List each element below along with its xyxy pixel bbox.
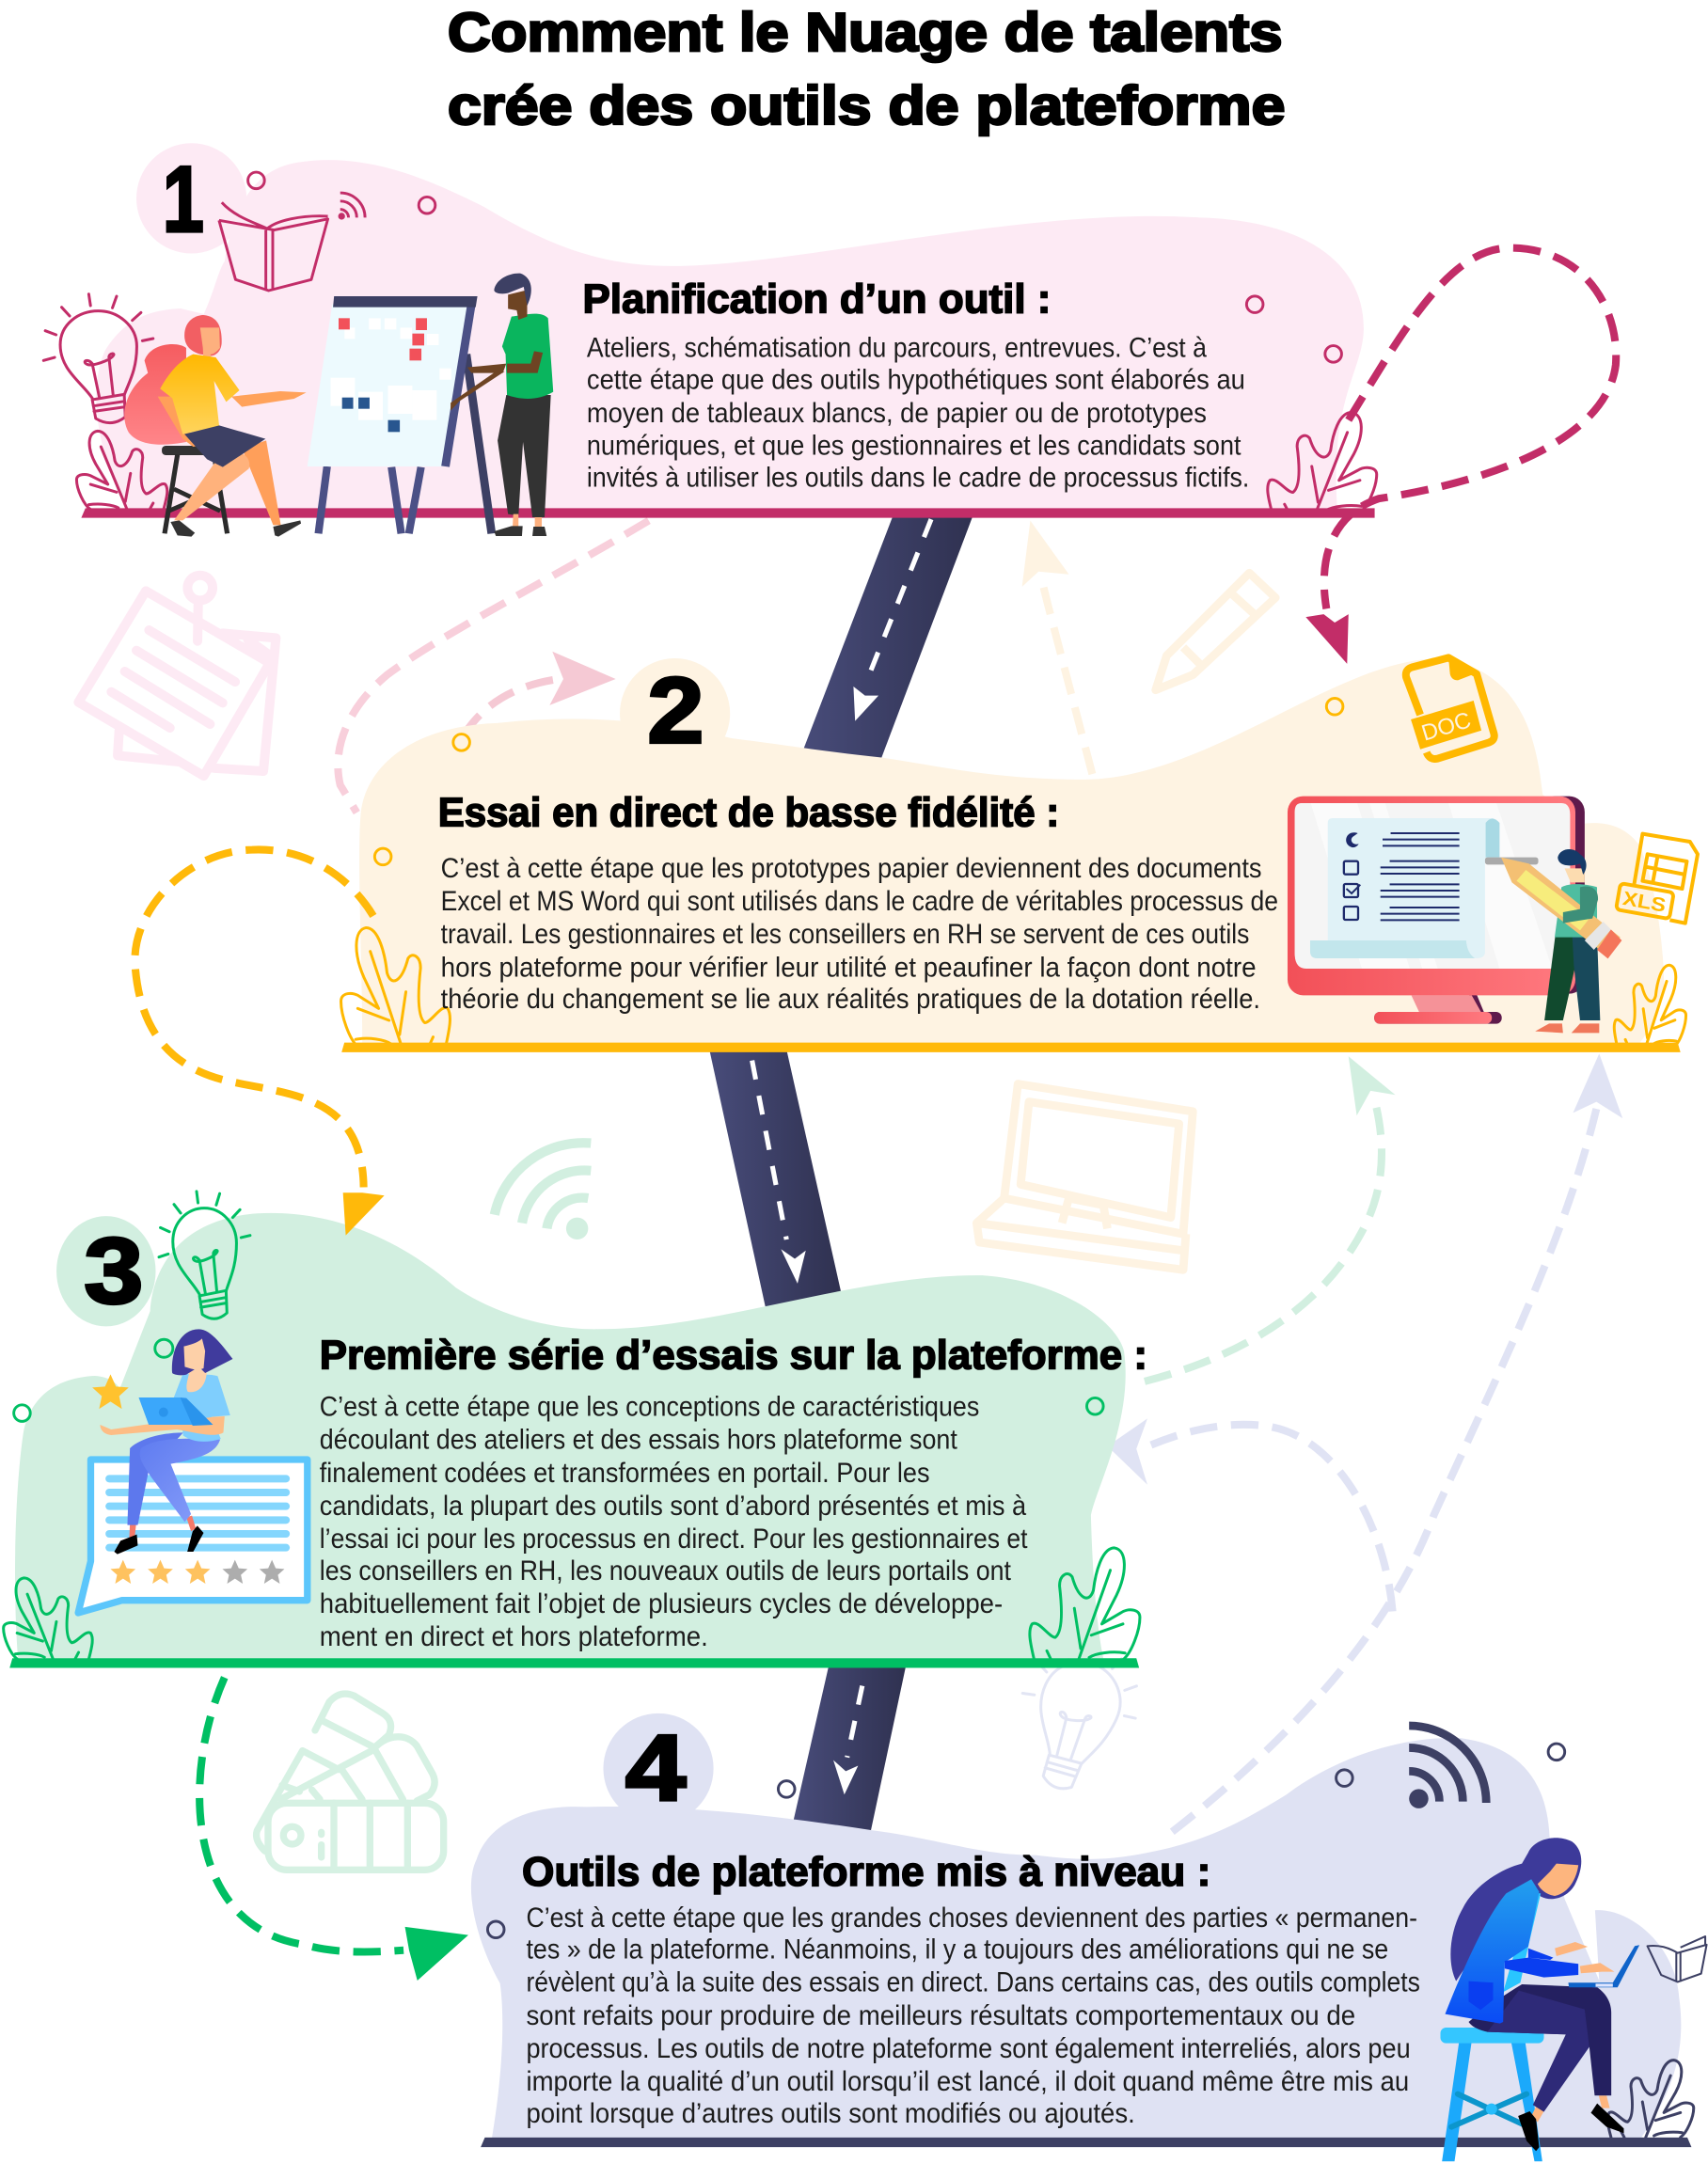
seated woman [100,1329,232,1555]
dashed arrow: faded pink into step 2 [463,652,616,737]
plant right [1030,1548,1140,1660]
illustration: woman with laptop on a review bubble [78,1329,308,1613]
small rings [248,172,1341,362]
icon: XLS file [1616,834,1698,924]
number 3: 3 [84,1219,143,1323]
body text: candidats, la plupart des outils sont d’abord présentés et mis à [320,1491,1026,1522]
standing man [451,274,553,536]
panel: step 3 premiere serie [4,1192,1147,1668]
body text [526,1902,1420,2129]
plant left [76,431,167,510]
seated woman [124,315,307,537]
dashed arrow: faded lavender to step 3 [1107,1418,1393,1611]
icon: open book [1648,1936,1707,1981]
small rings [374,699,1343,865]
body text: moyen de tableaux blancs, de papier ou de prototypes [587,398,1207,429]
yellow star [92,1374,129,1409]
background icon: faded notepad [78,576,276,776]
background icon: faded light bulb [992,1624,1157,1806]
dashed arrow: yellow from step 2 to step 3 [134,849,385,1236]
body text: C’est à cette étape que les grandes choses deviennent des parties « permanen- [526,1902,1417,1934]
road from step 1 to step 2 [800,510,975,768]
plant right [1614,965,1686,1046]
background icon: faded colour swatches [257,1694,444,1870]
plant left [341,927,450,1047]
heading: Première série d’essais sur la plateforme : [320,1333,1147,1379]
monitor [1288,797,1585,1024]
body text [441,853,1278,1015]
dashed arrow: faded cream up to step 1 [1022,521,1092,774]
illustration: woman on a stool with a laptop [1440,1838,1639,2161]
body text: invités à utiliser les outils dans le cadre de processus fictifs. [587,463,1249,494]
icon: wifi [1409,1726,1486,1808]
heading: Essai en direct de basse fidélité : [438,790,1059,836]
number badge [136,143,246,253]
body text: ment en direct et hors plateforme. [320,1621,708,1652]
road from step 3 to step 4 [794,1664,907,1839]
small rings [487,1744,1565,1938]
number badge [603,1713,714,1824]
body text: cette étape que des outils hypothétiques sont élaborés au [587,365,1245,396]
man with pencil [1501,849,1621,1033]
number badge [56,1216,155,1326]
icon: DOC file: DOC [1418,707,1474,747]
body text [587,332,1249,494]
icon: light bulb [43,294,153,423]
background icon: faded wifi [495,1143,591,1239]
floor line [81,508,1375,518]
body text [320,1392,1028,1652]
icon: wifi [340,193,365,218]
background blob [471,1738,1681,2139]
dashed arrow: faded green up to step 2 [1145,1056,1396,1381]
body text: travail. Les gestionnaires et les conseillers en RH se servent de ces outils [441,919,1249,950]
dashed arrow: faded pink from step 1 to step 2 [338,521,649,813]
body text: sont refaits pour produire de meilleurs résultats comportementaux ou de [526,2000,1355,2031]
number 2: 2 [647,658,704,763]
background icon: faded laptop [976,1084,1193,1270]
illustration: two people at a whiteboard [124,274,553,537]
body text: C’est à cette étape que les conceptions de caractéristiques [320,1392,979,1423]
heading: Planification d’un outil : [582,276,1051,322]
body text: processus. Les outils de notre plateforme sont également interreliés, alors peu [526,2033,1411,2064]
number 4: 4 [625,1716,686,1821]
plant left [4,1578,92,1659]
body text: révèlent qu’à la suite des essais en direct. Dans certains cas, des outils complets [526,1967,1420,1998]
background icon: faded pencil [1156,573,1275,690]
road from step 2 to step 3 [708,1041,842,1316]
dashed arrow: green from step 3 to step 4 [199,1678,468,1981]
dashed arrow: faded lavender up to step 2 [1172,1053,1622,1832]
icon: open book [219,202,328,291]
heading: Outils de plateforme mis à niveau : [522,1849,1210,1895]
icon: DOC file [1406,657,1494,759]
checklist paper [1310,818,1539,958]
floor line [341,1043,1681,1052]
illustration: monitor with checklist and man with pencil [1288,797,1698,1033]
panel: step 4 outils mis a niveau [471,1713,1707,2161]
plant right [1607,2060,1694,2138]
title [448,3,1285,136]
body text: Ateliers, schématisation du parcours, entrevues. C’est à [587,332,1207,363]
body text: finalement codées et transformées en portail. Pour les [320,1458,930,1489]
body text: importe la qualité d’un outil lorsqu’il est lancé, il doit quand même être mis au [526,2066,1409,2097]
background blob [15,1213,1126,1658]
plant right [1268,413,1377,513]
background blob [359,659,1664,1044]
body text: théorie du changement se lie aux réalités pratiques de la dotation réelle. [441,984,1260,1015]
number badge [620,658,730,768]
body text: tes » de la plateforme. Néanmoins, il y a toujours des améliorations qui ne se [526,1934,1388,1966]
body text: découlant des ateliers et des essais hors plateforme sont [320,1425,957,1456]
background blob [96,160,1364,513]
floor line [481,2138,1691,2147]
number 1: 1 [163,148,204,252]
body text: point lorsque d’autres outils sont modifiés ou ajoutés. [526,2098,1135,2129]
panel: step 1 planification [43,143,1377,537]
icon: light bulb [159,1192,250,1318]
title: crée des outils de plateforme [448,76,1285,136]
body text: les conseillers en RH, les nouveaux outils de leurs portails ont [320,1555,1012,1587]
body text: hors plateforme pour vérifier leur utilité et peaufiner la façon dont notre [441,952,1257,983]
review speech bubble [78,1460,308,1613]
body text: numériques, et que les gestionnaires et les candidats sont [587,430,1241,461]
body text: C’est à cette étape que les prototypes papier deviennent des documents [441,853,1261,884]
panel: step 2 essai en direct [341,657,1698,1052]
body text: habituellement fait l’objet de plusieurs cycles de développe- [320,1588,1003,1619]
body text: l’essai ici pour les processus en direct. Pour les gestionnaires et [320,1524,1028,1555]
body text: Excel et MS Word qui sont utilisés dans le cadre de véritables processus de [441,886,1278,917]
title: Comment le Nuage de talents [448,3,1282,63]
floor line [9,1658,1139,1668]
icon: XLS file: XLS [1621,888,1668,917]
small rings [14,1339,1103,1421]
whiteboard [308,296,492,533]
dashed arrow: crimson from step 1 down to step 2 [1305,248,1616,664]
seated woman [1445,1838,1639,2151]
stool [1440,2028,1543,2161]
